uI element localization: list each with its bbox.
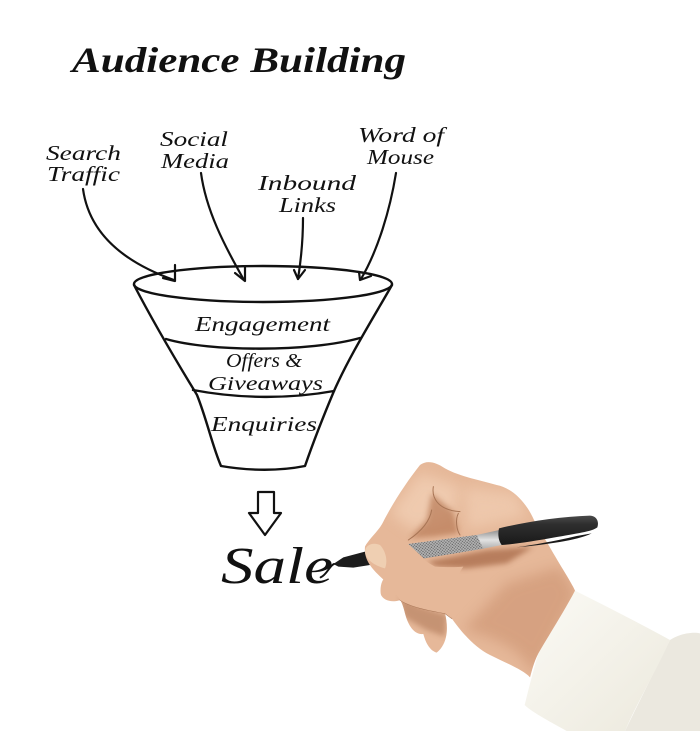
shadow under pen: [427, 547, 533, 568]
funnel: [134, 266, 392, 470]
shadow behind fingers: [410, 493, 458, 538]
thumb: [365, 537, 463, 618]
title: Audience Building: [70, 40, 406, 80]
arrow: Word of Mouse to funnel: [359, 173, 396, 280]
funnel outline: [134, 266, 392, 470]
label: Search Traffic: Traffic: [47, 162, 121, 186]
arrow: Inbound Links to funnel: [294, 218, 305, 279]
label: Word of Mouse: Mouse: [366, 145, 434, 169]
pen clip: [517, 533, 592, 547]
label: Search Traffic: Search: [46, 141, 121, 165]
pen barrel: [408, 530, 502, 558]
palm shading: [463, 567, 577, 677]
arrow: Search Traffic to funnel: [83, 189, 175, 281]
label: Inbound Links: Links: [278, 193, 336, 217]
pen cap: [498, 516, 598, 545]
funnel label: Enquiries: Enquiries: [210, 412, 317, 436]
label: Sale: Sale: [221, 538, 333, 595]
hand with pen: [321, 450, 700, 731]
label: Social Media: Media: [160, 149, 229, 173]
finger highlights: [393, 474, 458, 529]
ink stroke: [321, 564, 334, 577]
arrow: funnel to sale: [249, 492, 281, 535]
thumbnail: [365, 544, 386, 568]
shirt sleeve: [525, 591, 700, 731]
finger creases: [400, 487, 460, 618]
pen nib: [333, 552, 370, 568]
funnel label: Engagement: Engagement: [194, 312, 331, 336]
label: Word of Mouse: Word of: [358, 123, 448, 147]
funnel label: Offers and Giveaways: [208, 350, 323, 395]
label: Social Media: [160, 127, 229, 173]
funnel label: Offers and Giveaways: Giveaways: [208, 373, 323, 395]
label: Social Media: Social: [160, 127, 228, 151]
label: Inbound Links: Inbound: [257, 171, 357, 195]
shadow between fingers: [400, 597, 447, 637]
hand: [365, 462, 575, 678]
funnel label: Offers and Giveaways: Offers &: [226, 350, 302, 372]
label: Search Traffic: [46, 141, 121, 186]
arrow: Social Media to funnel: [201, 173, 245, 281]
label: Inbound Links: [257, 171, 357, 217]
label: Word of Mouse: [358, 123, 448, 169]
